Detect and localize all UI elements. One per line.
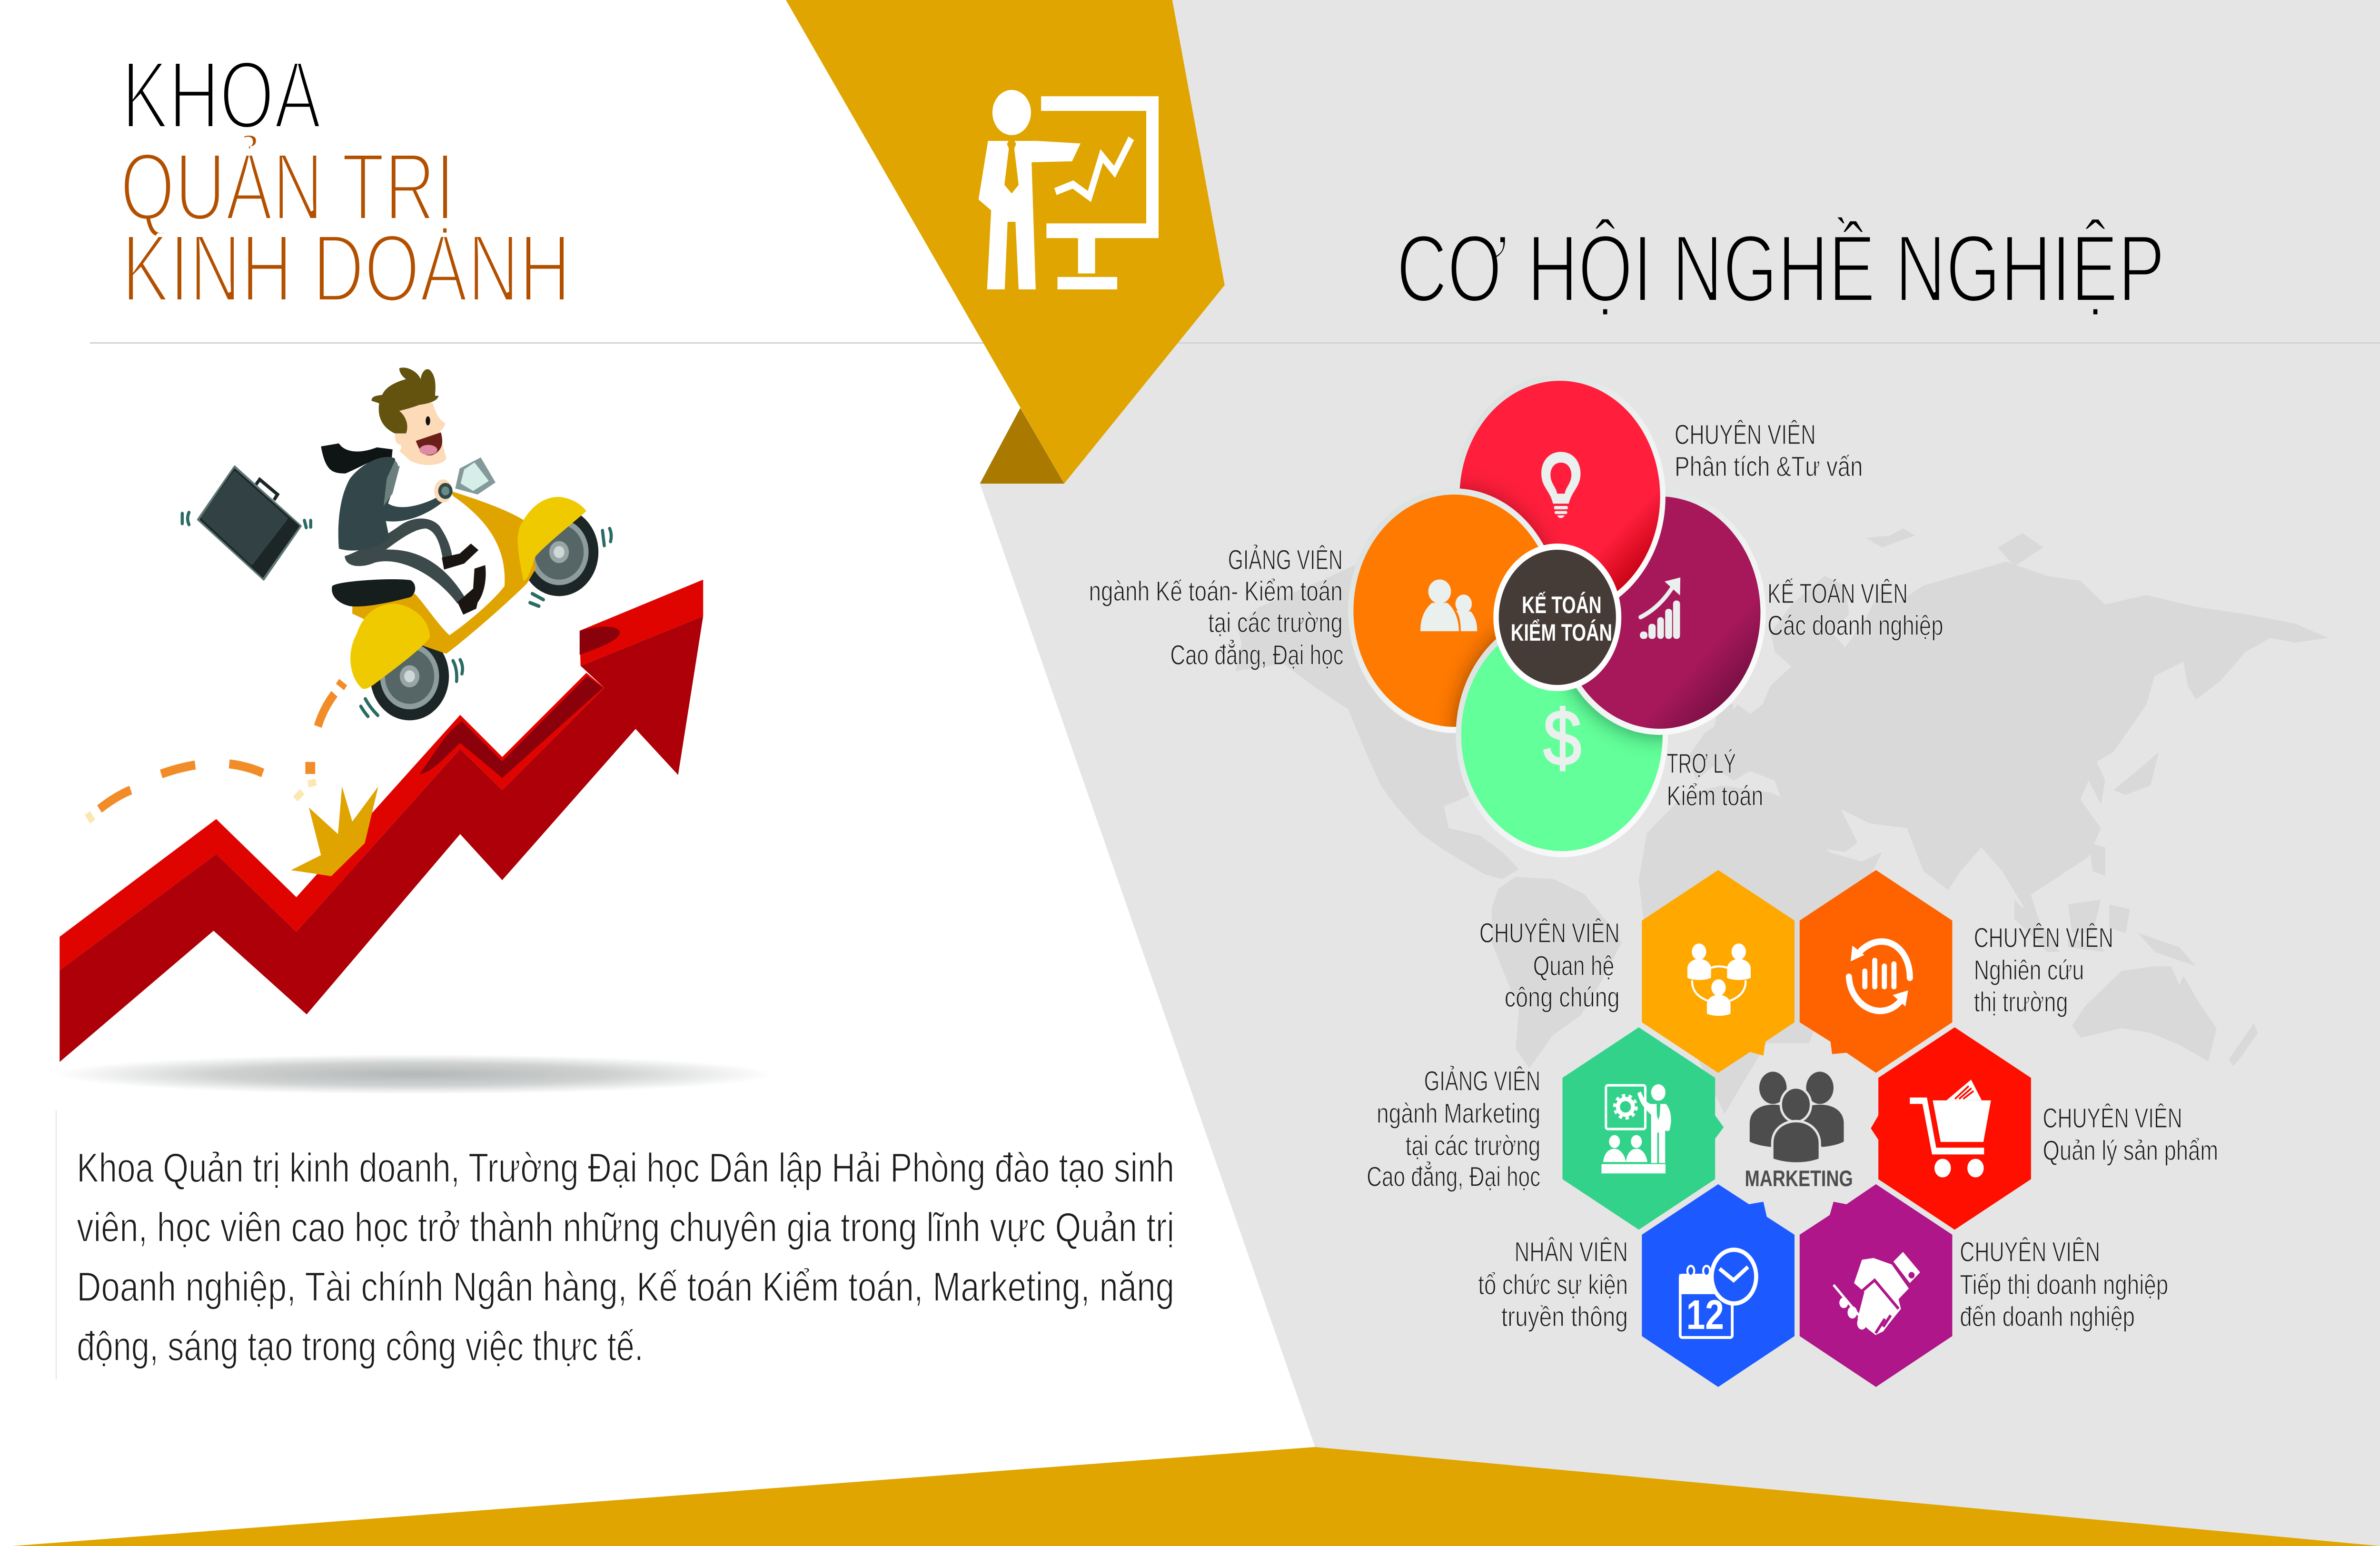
label: market research (1974, 922, 2113, 1018)
label: accounting lecturer: tại các trường (1208, 607, 1343, 638)
label: public relations: công chúng (1505, 982, 1620, 1013)
label: accountant (1767, 578, 1944, 641)
hexagon: events staff: 12 (1686, 1292, 1724, 1338)
centre label: KẾ TOÁN (1522, 592, 1602, 618)
label: analyst (1675, 419, 1863, 482)
hexagon: events staff (1642, 1184, 1795, 1387)
icon: two people (1420, 579, 1477, 631)
hexagon: lecturer in marketing (1563, 1027, 1724, 1229)
map: Eurasia (1688, 562, 2328, 933)
circle: purple accountant (1554, 490, 1766, 735)
bottom gold triangle band (12, 1447, 2380, 1546)
label: B2B marketing: đến doanh nghiệp (1960, 1301, 2135, 1332)
illustration: ground shadow (56, 1054, 774, 1094)
seat (332, 579, 415, 606)
label: analyst: CHUYÊN VIÊN (1675, 419, 1816, 450)
icon: dollar sign: $ (1543, 694, 1581, 782)
centre label: KIỂM TOÁN (1511, 619, 1612, 646)
circle: green assistant (1456, 639, 1668, 857)
label: product management: CHUYÊN VIÊN (2043, 1103, 2182, 1134)
circle: orange lecturer (1348, 617, 1497, 733)
red arrow (60, 580, 703, 1062)
rear wheel (370, 632, 449, 720)
label: product management: Quản lý sản phẩm (2043, 1135, 2218, 1166)
vertical rule beside paragraph (56, 1110, 57, 1379)
label: market research: CHUYÊN VIÊN (1974, 922, 2113, 953)
windshield (455, 457, 496, 495)
banner shape (786, 0, 1225, 484)
panel background: grey right panel (980, 0, 2380, 1546)
label: events staff: truyền thông (1501, 1301, 1628, 1332)
hexagon: public relations (1642, 870, 1795, 1073)
text block: faculty description: Doanh nghiệp, Tài chính Ngân hàng, Kế toán Kiểm toán, Marketing, năng (77, 1264, 1174, 1310)
text block: faculty description (77, 1145, 1174, 1369)
label: marketing lecturer: ngành Marketing (1377, 1098, 1540, 1129)
hexagon: product management (1871, 1027, 2031, 1229)
heading: CƠ HỘI NGHỀ NGHIỆP: CƠ HỘI NGHỀ NGHIỆP (1397, 215, 2165, 322)
impact burst (291, 786, 378, 876)
icon: rising bars (1640, 577, 1680, 639)
text block: faculty description: động, sáng tạo trong công việc thực tế. (77, 1324, 644, 1369)
text block: faculty description: Khoa Quản trị kinh doanh, Trường Đại học Dân lập Hải Phòng đào tạo sinh (77, 1145, 1174, 1191)
label: market research: Nghiên cứu (1974, 955, 2084, 986)
label: analyst: Phân tích &Tư vấn (1675, 451, 1863, 482)
title: KHOA QUẢN TRỊ KINH DOANH: KINH DOANH (122, 215, 571, 322)
scooter frame (352, 491, 536, 654)
motion ticks (182, 513, 611, 716)
icon: presenter with chart board (979, 90, 1159, 289)
label: events staff: NHÂN VIÊN (1515, 1237, 1628, 1268)
label: audit assistant: TRỢ LÝ (1667, 748, 1736, 779)
map: Australia (2072, 966, 2217, 1061)
label: marketing lecturer (1367, 1066, 1540, 1192)
label: B2B marketing: CHUYÊN VIÊN (1960, 1237, 2100, 1268)
label: accounting lecturer: Cao đẳng, Đại học (1170, 640, 1344, 671)
label: audit assistant: Kiểm toán (1667, 781, 1763, 812)
rear fender (350, 604, 430, 689)
title: KHOA QUẢN TRỊ KINH DOANH: QUẢN TRỊ (120, 133, 455, 241)
header rule line (90, 342, 2380, 344)
title: KHOA QUẢN TRỊ KINH DOANH (120, 41, 571, 322)
map: New Zealand (2229, 1023, 2258, 1066)
world map (1235, 524, 2328, 1133)
label: marketing lecturer: Cao đẳng, Đại học (1367, 1161, 1540, 1192)
illustration: businessman on scooter riding a red arrow (60, 367, 703, 1062)
label: accounting lecturer: ngành Kế toán- Kiểm toán (1089, 576, 1343, 607)
label: accountant: Các doanh nghiệp (1767, 610, 1944, 641)
label: public relations: Quan hệ (1533, 951, 1614, 981)
map: UK and Iceland (1659, 662, 1734, 733)
label: marketing lecturer: tại các trường (1406, 1130, 1540, 1161)
label: product management (2043, 1103, 2218, 1166)
label: B2B marketing: Tiếp thị doanh nghiệp (1960, 1269, 2168, 1300)
label: accountant: KẾ TOÁN VIÊN (1767, 578, 1908, 609)
map: arctic islands (1866, 528, 2043, 566)
chart: marketing hexagon cluster (1563, 870, 2031, 1387)
chart: accounting career circles (1348, 375, 1766, 857)
label: accounting lecturer (1089, 545, 1344, 671)
map: Indonesia islands (2014, 842, 2196, 966)
circle: centre disc (1493, 544, 1621, 691)
label: audit assistant (1667, 748, 1763, 812)
gold banner with presenter icon (786, 0, 1225, 484)
marketing label: MARKETING (1745, 1166, 1853, 1191)
label: events staff (1478, 1237, 1628, 1332)
map: South America (1492, 877, 1622, 1068)
map: North America (1235, 524, 1552, 879)
bounce trail dashes (88, 681, 346, 822)
front fender (518, 497, 586, 581)
banner fold shadow (980, 408, 1064, 484)
hexagon: B2B marketing (1800, 1184, 1952, 1387)
map: Japan (2113, 752, 2159, 795)
icons in circles (1420, 452, 1680, 639)
label: public relations (1479, 918, 1620, 1013)
title: KHOA QUẢN TRỊ KINH DOANH: KHOA (122, 41, 321, 149)
label: marketing lecturer: GIẢNG VIÊN (1424, 1066, 1540, 1097)
circle: orange overlap above red (1348, 488, 1560, 733)
label: accounting lecturer: GIẢNG VIÊN (1228, 545, 1343, 575)
centre label (1511, 592, 1612, 646)
label: market research: thị trường (1974, 987, 2068, 1018)
label: events staff: tổ chức sự kiện (1478, 1269, 1628, 1300)
label: B2B marketing (1960, 1237, 2168, 1332)
map: Africa (1639, 785, 1882, 1133)
businessman (321, 367, 486, 614)
icon: light bulb (1541, 452, 1580, 518)
circle: red analyst (1459, 377, 1666, 598)
label: public relations: CHUYÊN VIÊN (1479, 918, 1620, 949)
centre patch (1716, 1043, 1880, 1215)
text block: faculty description: viên, học viên cao học trở thành những chuyên gia trong lĩnh vực Quản trị (77, 1205, 1174, 1250)
briefcase (198, 466, 301, 580)
icon: marketing team (1750, 1072, 1844, 1163)
front wheel (520, 508, 598, 596)
hexagon: market research (1800, 870, 1952, 1073)
